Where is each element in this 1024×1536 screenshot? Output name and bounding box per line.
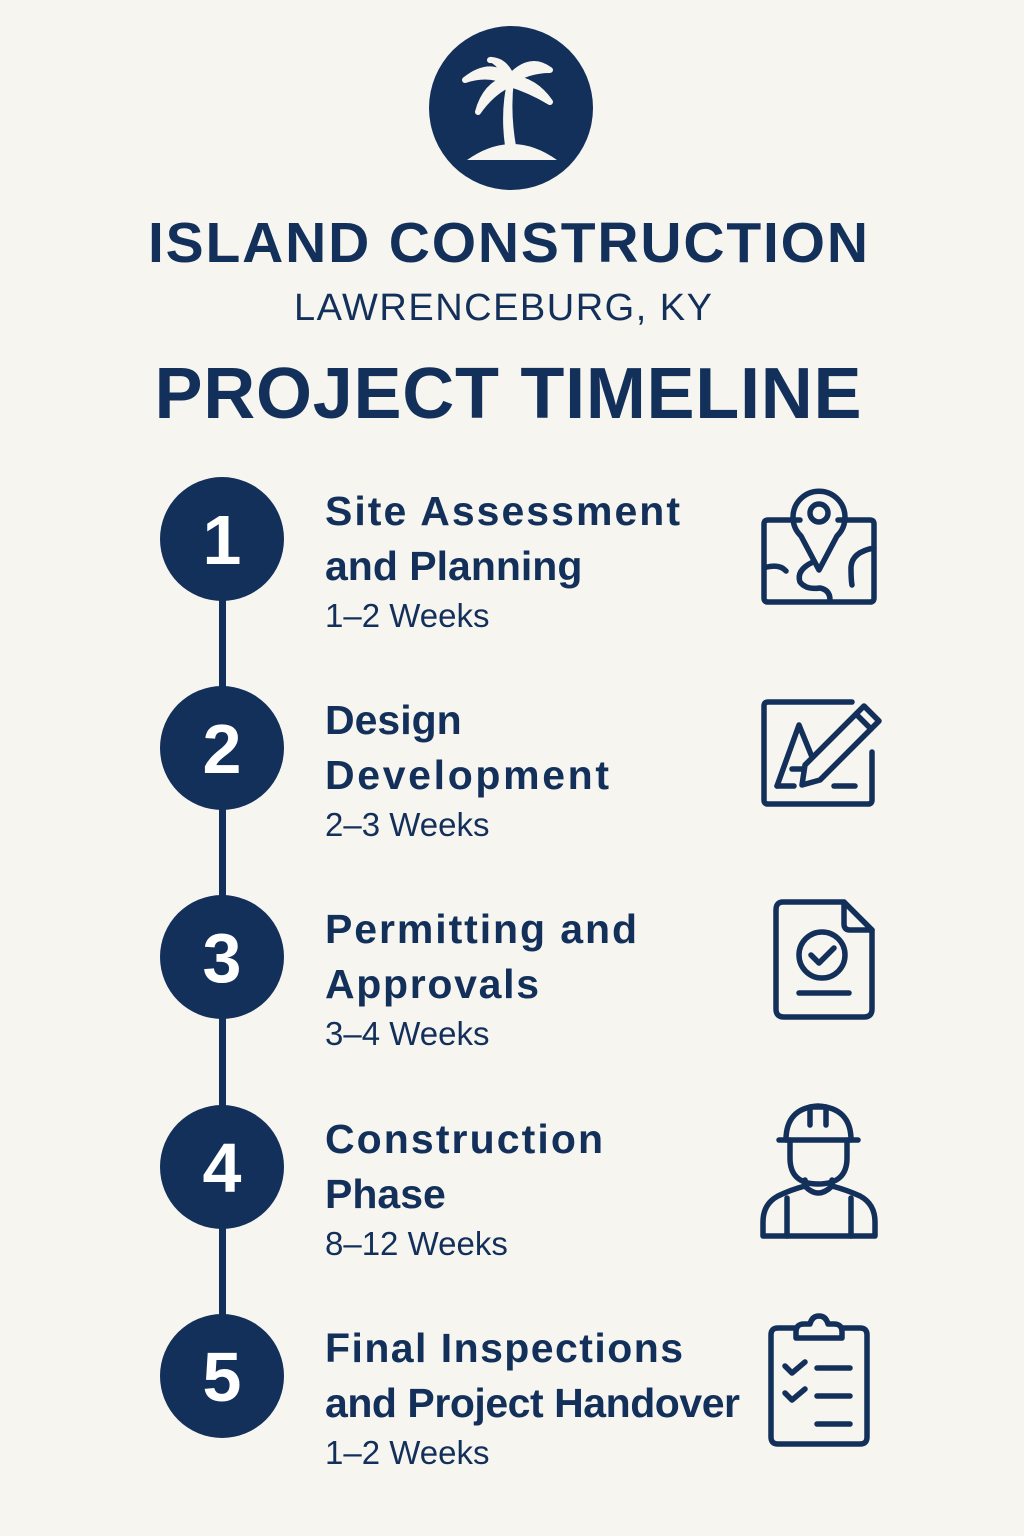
step 2: 2–3 Weeks	[325, 806, 489, 843]
step 3	[160, 895, 637, 1052]
icon: checklist clipboard	[771, 1316, 867, 1444]
step 4: 8–12 Weeks	[325, 1225, 508, 1262]
step 5: 1–2 Weeks	[325, 1434, 489, 1471]
heading: PROJECT TIMELINE	[154, 354, 862, 434]
subtitle: LAWRENCEBURG, KY	[294, 287, 712, 329]
step 3: 3	[203, 919, 241, 997]
step 5: 5	[203, 1338, 241, 1416]
step 2: Design	[325, 697, 462, 743]
step 5	[160, 1314, 740, 1471]
step 3: Approvals	[325, 961, 539, 1007]
step 3: Permitting and	[325, 906, 637, 952]
step 4: 4	[203, 1129, 242, 1207]
step 2	[160, 686, 609, 843]
step 4	[160, 1105, 603, 1262]
icon: approved document	[776, 902, 872, 1017]
timeline line	[219, 560, 226, 1360]
step 1: 1	[203, 501, 241, 579]
step 5: Final Inspections	[325, 1325, 683, 1371]
icon: map	[764, 491, 874, 602]
icon: design edit	[764, 702, 879, 804]
step 1: and Planning	[325, 543, 582, 589]
logo: palm island	[429, 26, 593, 190]
step 2: 2	[203, 710, 241, 788]
step 2: Development	[325, 752, 609, 798]
step 4: Phase	[325, 1171, 446, 1217]
icon: worker	[763, 1106, 875, 1236]
title: ISLAND CONSTRUCTION	[148, 211, 868, 275]
step 3: 3–4 Weeks	[325, 1015, 489, 1052]
step 1: Site Assessment	[325, 488, 680, 534]
step 5: and Project Handover	[325, 1380, 740, 1426]
step 1: 1–2 Weeks	[325, 597, 489, 634]
step 1	[160, 477, 680, 634]
step 4: Construction	[325, 1116, 603, 1162]
